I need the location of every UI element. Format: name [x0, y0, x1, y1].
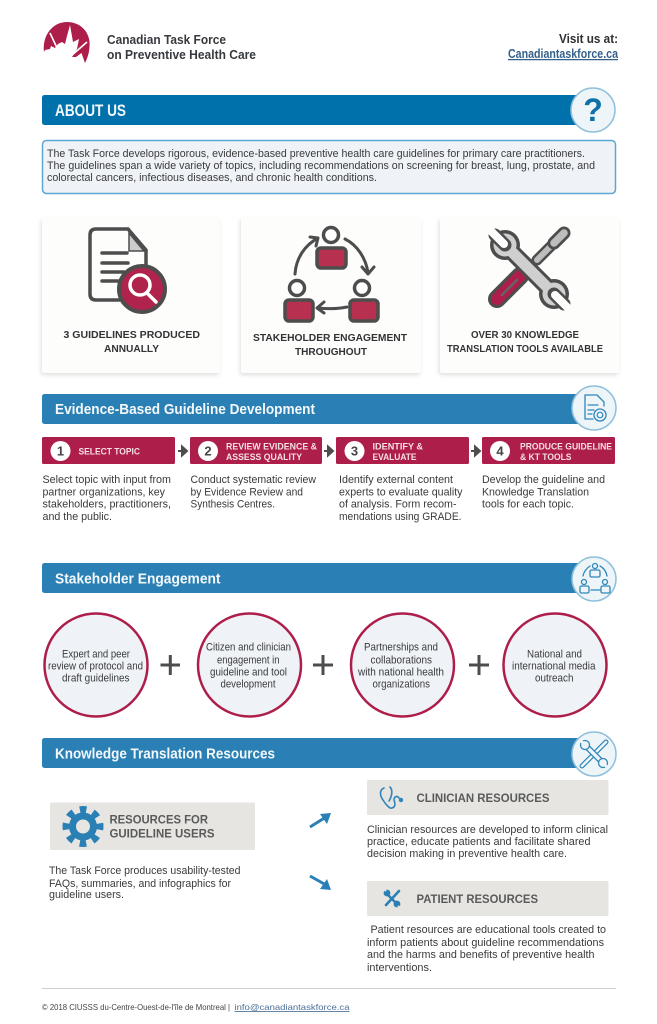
about us text panel: [42, 140, 616, 194]
engagement circle 1: [44, 614, 148, 716]
step 2: [190, 437, 322, 464]
panel: resources for guideline users: RESOURCES FOR: [110, 812, 208, 826]
header: [43, 22, 619, 63]
caption: [253, 332, 408, 358]
organization name: Canadian Task Force: [107, 33, 226, 47]
engagement circle 2: guideline and tool: [210, 666, 287, 678]
step 3: IDENTIFY &: [372, 442, 423, 452]
step 3 description: experts to evaluate quality: [339, 486, 463, 498]
caption: [447, 329, 603, 355]
step 2: ASSESS QUALITY: [226, 452, 303, 463]
section bar: stakeholder engagement: Stakeholder Engagement: [55, 570, 221, 588]
resources description: The Task Force produces usability-tested: [49, 865, 240, 877]
website link: Visit us at:: [559, 32, 618, 46]
engagement circle 3: collaborations: [370, 654, 432, 666]
about us text panel: The guidelines span a wide variety of topics, including recommendations on screening for breast, lung, prostate, and: [47, 160, 595, 172]
step 4: PRODUCE GUIDELINE: [520, 442, 612, 452]
logo: maple leaf dome: [43, 22, 90, 63]
patient description: and the harms and benefits of preventive health: [367, 949, 594, 961]
patient description: interventions.: [367, 962, 432, 974]
plus sign: [469, 655, 489, 675]
engagement circle 1: draft guidelines: [62, 672, 130, 684]
patient description: [367, 924, 606, 974]
step 4: 4: [496, 444, 504, 458]
step 4 description: Develop the guideline and: [482, 474, 605, 486]
about us text panel: colorectal cancers, infectious diseases, and chronic health conditions.: [47, 172, 377, 184]
clinician description: practice, educate patients and facilitate shared: [367, 836, 590, 848]
step 4: [482, 437, 615, 464]
section bar: about us: ABOUT US: [55, 101, 126, 120]
arrow: to clinician resources: [310, 813, 331, 827]
step 2: REVIEW EVIDENCE &: [226, 442, 317, 452]
section bar: evidence-based guideline development: Evidence-Based Guideline Development: [55, 401, 315, 418]
organization name: [107, 33, 256, 62]
step 1: [42, 437, 175, 464]
caption: [64, 329, 200, 355]
step 3 description: mendations using GRADE.: [339, 511, 462, 523]
step 3 description: Identify external content: [339, 474, 453, 486]
footer: info@canadiantaskforce.ca: [234, 1002, 350, 1012]
panel: patient resources: PATIENT RESOURCES: [416, 892, 538, 906]
caption: TRANSLATION TOOLS AVAILABLE: [447, 343, 603, 355]
engagement circle 3: with national health: [357, 666, 444, 678]
engagement circle 1: Expert and peer: [62, 648, 130, 660]
footer: © 2018 CIUSSS du-Centre-Ouest-de-l'île de Montreal |: [42, 1002, 230, 1012]
engagement circle 3: [351, 614, 454, 716]
arrow: step 1 to 2: [178, 446, 187, 456]
step 1 description: [42, 474, 171, 523]
caption: 3 GUIDELINES PRODUCED: [64, 329, 200, 341]
resources description: guideline users.: [49, 889, 124, 901]
step 1 description: partner organizations, key: [42, 486, 165, 498]
step 1: SELECT TOPIC: [78, 446, 140, 458]
engagement circle 2: Citizen and clinician: [206, 642, 291, 654]
step 2: 2: [204, 444, 212, 458]
step 1 description: Select topic with input from: [42, 474, 171, 486]
section bar: about us: [42, 88, 615, 132]
icon: stethoscope: [380, 787, 403, 808]
panel: clinician resources: CLINICIAN RESOURCES: [416, 791, 550, 805]
engagement circle 3: Partnerships and: [364, 642, 438, 654]
arrow: step 3 to 4: [471, 446, 480, 456]
icon: people cycle: [285, 228, 378, 321]
step 4 description: tools for each topic.: [482, 498, 574, 510]
engagement circle 1: review of protocol and: [48, 660, 143, 672]
website link: [508, 32, 619, 61]
icon: gear: [66, 810, 100, 844]
panel: resources for guideline users: GUIDELINE USERS: [110, 826, 214, 840]
about us text panel: The Task Force develops rigorous, evidence-based preventive health care guidelines for primary care practitioners.: [47, 148, 585, 160]
step 4 description: [482, 474, 605, 510]
arrow: to patient resources: [310, 876, 331, 890]
website link: Canadiantaskforce.ca: [508, 47, 619, 61]
engagement circle 2: development: [220, 678, 276, 690]
resources description: FAQs, summaries, and infographics for: [49, 878, 231, 890]
step 4: & KT TOOLS: [520, 452, 572, 463]
icon: tools: [384, 889, 400, 908]
step 2 description: [190, 474, 316, 510]
caption: OVER 30 KNOWLEDGE: [471, 329, 579, 341]
panel: clinician resources: [367, 780, 608, 815]
step 1 description: stakeholders, practitioners,: [42, 498, 171, 510]
arrow: step 2 to 3: [324, 446, 333, 456]
step 3 description: [339, 474, 463, 523]
engagement circle 4: National and: [527, 648, 582, 660]
step 3 description: of analysis. Form recom-: [339, 498, 457, 510]
patient description: inform patients about guideline recommendations: [367, 937, 604, 949]
organization name: on Preventive Health Care: [107, 48, 256, 62]
card: stakeholder engagement: [241, 218, 421, 373]
step 1: 1: [57, 444, 64, 458]
engagement circle 4: outreach: [535, 672, 574, 684]
section bar: evidence-based guideline development: [42, 386, 616, 430]
step 4 description: Knowledge Translation: [482, 486, 589, 498]
clinician description: [367, 824, 608, 860]
engagement circle 3: organizations: [372, 678, 430, 690]
step 1 description: and the public.: [42, 511, 112, 523]
card: knowledge translation tools: [440, 218, 619, 373]
step 2 description: Conduct systematic review: [190, 474, 316, 486]
step 3: [336, 437, 469, 464]
plus sign: [160, 655, 180, 675]
step 3: EVALUATE: [372, 452, 416, 463]
panel: resources for guideline users: [50, 802, 255, 850]
clinician description: decision making in preventive health care.: [367, 848, 567, 860]
panel: patient resources: [367, 881, 608, 916]
caption: STAKEHOLDER ENGAGEMENT: [253, 332, 408, 344]
step 2 description: Synthesis Centres.: [190, 498, 275, 510]
icon: document with magnifier: [90, 229, 165, 312]
footer: [42, 1002, 350, 1012]
icon: wrench and screwdriver: [488, 228, 571, 311]
engagement circle 2: [198, 614, 301, 716]
engagement circle 2: engagement in: [217, 654, 280, 666]
caption: THROUGHOUT: [295, 346, 368, 358]
engagement circle 4: international media: [512, 660, 596, 672]
caption: ANNUALLY: [104, 343, 159, 355]
step 2 description: by Evidence Review and: [190, 486, 303, 498]
plus sign: [313, 655, 333, 675]
engagement circle 4: [504, 614, 606, 716]
section bar: knowledge translation resources: Knowledge Translation Resources: [55, 746, 275, 762]
section bar: stakeholder engagement: [42, 557, 616, 601]
patient description: Patient resources are educational tools created to: [370, 924, 606, 936]
section bar: about us: ?: [583, 92, 603, 128]
clinician description: Clinician resources are developed to inform clinical: [367, 824, 608, 836]
resources description: [49, 865, 240, 901]
card: guidelines produced: [42, 218, 220, 373]
step 3: 3: [351, 444, 358, 458]
section bar: knowledge translation resources: [42, 732, 616, 776]
